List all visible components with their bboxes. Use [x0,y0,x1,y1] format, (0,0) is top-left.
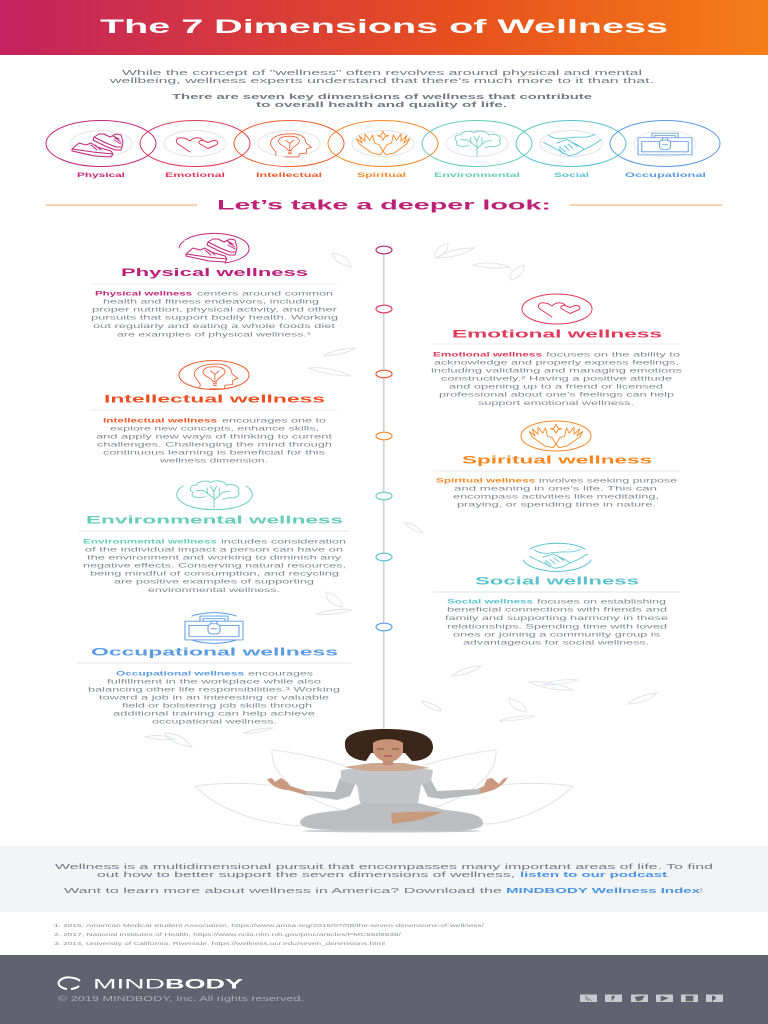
body text: Spiritual wellness [436,478,535,484]
body text: wellness dimension. [158,458,268,464]
body text [91,290,339,338]
call to action band: ! [700,886,702,895]
body text: and opening up to a friend or licensed [449,384,664,390]
heading: Physical wellness [121,267,308,279]
icon labels: Intellectual [256,172,323,179]
body text: acknowledge and properly express feelings, [434,360,679,366]
body text: includes consideration [221,538,347,546]
body text: family and supporting harmony in these [445,615,669,622]
body text: explore new concepts, enhance skills, [110,426,319,432]
body text: relationships. Spending time with loved [447,624,668,630]
heading: Social wellness [475,576,639,588]
icon: toolbox [185,613,243,643]
body text [445,598,669,646]
icon: tree [177,481,252,510]
panel: spiritual wellness [433,421,680,508]
panel: intellectual wellness [91,360,337,464]
icon labels: Emotional [165,172,226,179]
icon: occupational [610,120,720,166]
body text: toward a job in an interesting or valuable [99,694,330,702]
timeline [376,246,392,732]
heading: Occupational wellness [91,646,338,658]
shadow [302,830,482,832]
body text: continuous learning is beneficial for this [103,450,326,456]
body text: Social wellness [447,598,533,606]
body text: including validating and managing emotions [431,368,683,374]
body text: constructively.² Having a positive attitude [441,376,673,382]
panel: occupational wellness [77,613,351,726]
call to action band: out how to better support the seven dimensions of wellness, [97,870,515,879]
body text: Environmental wellness [83,538,217,546]
body text: ones or joining a community group is [453,632,661,638]
hands and forearms [267,778,306,795]
call to action band: Wellness is a multidimensional pursuit that encompasses many important areas of life. To find [55,862,713,871]
call to action band: listen to our podcast [520,870,668,879]
icon: sneakers [179,233,249,263]
icon: social [516,120,626,166]
face [373,739,403,762]
body text: praying, or spending time in nature. [457,502,656,508]
icon labels: Occupational [625,172,707,179]
intro text: While the concept of "wellness" often revolves around physical and mental [122,68,643,77]
seven dimensions icon row [46,120,720,179]
body text: Occupational wellness [116,670,244,678]
icon labels: Spiritual [357,172,407,179]
references: 3. 2014, University of California, Riverside, https://wellness.ucr.edu/seven_dimensions.html [54,941,385,946]
logo [59,976,244,992]
body text: Intellectual wellness [103,418,217,424]
decorative leaves [145,243,657,747]
intro text: to overall health and quality of life. [256,100,507,109]
references [54,923,485,946]
icon labels: Social [554,172,590,179]
icon labels: Physical [77,172,126,179]
body text: balancing other life responsibilities.³ Working [88,686,341,694]
panel: social wellness [433,543,680,646]
body text: focuses on establishing [537,598,666,606]
body text [431,352,683,407]
intro text: There are seven key dimensions of wellness that contribute [172,92,593,101]
body text: centers around common [197,290,334,298]
icon: intellectual [234,120,344,166]
body text: proper nutrition, physical activity, and other [92,306,338,314]
body text: occupational wellness. [152,718,277,726]
icon: spiritual [328,120,438,166]
logo: BODY [165,976,244,992]
footer [0,955,768,1024]
meditating woman [267,729,508,832]
body text: Physical wellness [95,290,192,298]
body text [96,418,333,464]
body text: involves seeking purpose [539,478,677,484]
body text: health and fitness endeavors, including [103,298,320,306]
panel: emotional wellness [431,294,683,407]
timeline dots [376,246,392,631]
lotus outline [195,750,573,826]
title: The 7 Dimensions of Wellness [100,16,668,38]
body text: are examples of physical wellness.¹ [117,332,312,338]
body text: beneficial connections with friends and [447,606,668,614]
legs [300,803,483,831]
call to action band: . [667,870,669,879]
icon: handshake [523,543,591,571]
intro text: wellbeing, wellness experts understand that there’s much more to it than that. [108,76,654,85]
icon: physical [46,120,156,166]
references: 1. 2015, American Medical Student Association, https://www.amsa.org/2015/07/08/the-seven-dimensions-of-wellness/ [54,923,485,928]
body text: pursuits that support bodily health. Working [91,314,339,322]
body text: out regularly and eating a whole foods diet [93,323,335,330]
body text: are positive examples of supporting [114,578,315,586]
body text [88,670,341,726]
body text: being mindful of consumption, and recycling [90,570,340,578]
body text: the environment and working to diminish any [87,554,342,562]
icon: head with lightbulb [179,360,249,390]
call to action band: MINDBODY Wellness Index [506,886,701,895]
body text: field or bolstering job skills through [122,702,312,710]
section heading: deeper look: Let’s take a deeper look: [217,196,551,212]
body text: support emotional wellness. [478,400,634,407]
body text: and meaning in one’s life. This can [454,486,658,492]
heading: Spiritual wellness [462,454,652,466]
icon labels [77,172,707,179]
intro text [108,68,654,109]
body text: encourages one to [222,418,327,424]
torso [341,768,433,803]
call to action band: Want to learn more about wellness in America? Download the [64,886,502,895]
body text: additional training can help achieve [113,710,316,718]
body text [436,478,677,508]
logo: MIND [93,976,165,992]
icon: environmental [422,120,532,166]
body text: of the individual impact a person can have on [85,546,344,554]
social icons [580,994,723,1002]
body text: and apply new ways of thinking to current [96,434,332,440]
heading: Emotional wellness [452,328,662,340]
heading: Environmental wellness [86,514,343,526]
body text [83,538,347,594]
body text: focuses on the ability to [546,352,681,358]
body text: encourages [248,670,314,678]
references: 2. 2017, National Institutes of Health, https://www.ncbi.nlm.nih.gov/pmc/articles/PMC5508938/ [54,932,402,937]
body text: environmental wellness. [148,587,280,594]
header banner [0,0,768,55]
body text: Emotional wellness [433,352,542,358]
call to action band [0,846,768,912]
icon: emotional [140,120,250,166]
body text: advantageous for social wellness. [463,640,649,646]
body text: fulfillment in the workplace while also [107,678,322,686]
hair [345,729,433,761]
body text: negative effects. Conserving natural resources, [83,562,346,570]
icon: hearts [522,294,592,324]
icon labels: Environmental [434,172,521,179]
body text: challenges. Challenging the mind through [97,442,333,448]
heading: Intellectual wellness [104,394,325,406]
panel: environmental wellness [79,481,349,594]
body text: professional about one’s feelings can help [439,392,675,398]
panel: physical wellness [91,233,339,338]
sleeves [306,778,358,800]
copyright: © 2019 MINDBODY, Inc. All rights reserved. [58,994,304,1003]
icon: raised hands [521,421,591,451]
body text: encompass activities like meditating, [453,494,659,500]
